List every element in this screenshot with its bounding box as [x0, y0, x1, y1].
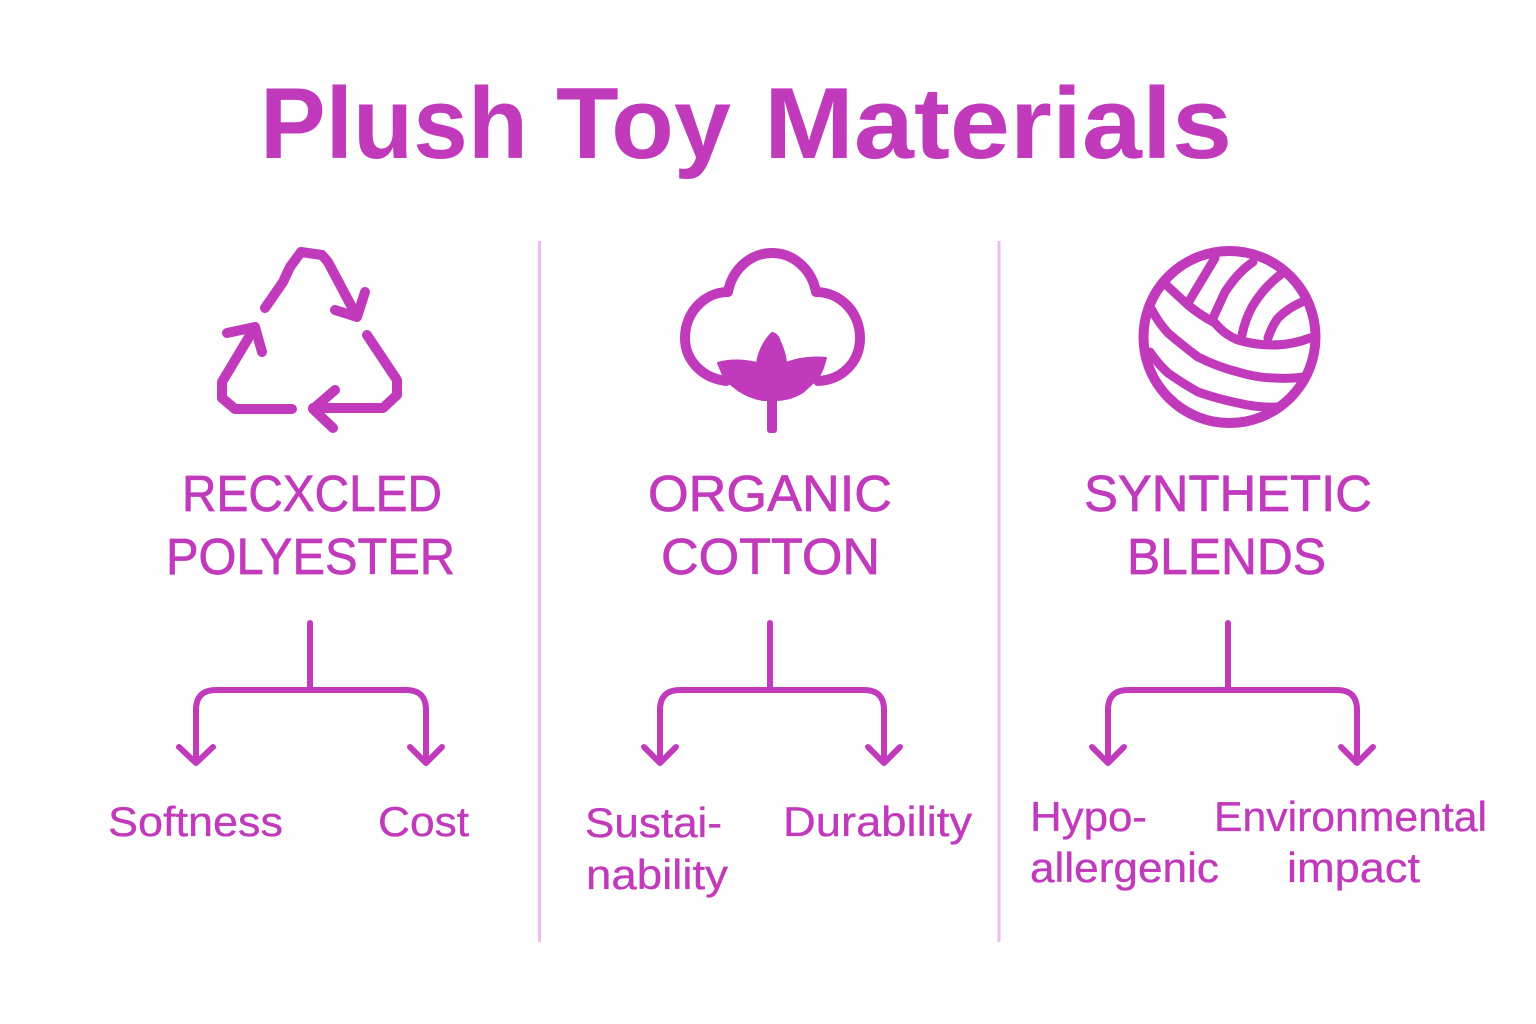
label: hypoallergenic: allergenic	[1030, 844, 1219, 891]
label: environmental impact	[1214, 793, 1487, 891]
heading: organic cotton: ORGANIC	[648, 465, 892, 522]
icon: cotton boll	[685, 253, 860, 433]
heading: organic cotton: COTTON	[661, 528, 880, 585]
icon: yarn ball	[1144, 251, 1316, 423]
connector arrows	[1092, 623, 1373, 763]
connector arrows	[179, 623, 442, 763]
heading: recycled polyester: POLYESTER	[166, 528, 455, 585]
label: environmental impact: impact	[1287, 844, 1420, 891]
panel: synthetic blends	[1030, 251, 1487, 891]
heading: organic cotton	[648, 465, 892, 585]
label: hypoallergenic: Hypo-	[1030, 793, 1147, 840]
icon: recycle arrows	[222, 252, 397, 428]
label: softness: Softness	[108, 798, 283, 845]
label: environmental impact: Environmental	[1214, 793, 1487, 840]
title: Materials	[764, 68, 1232, 180]
heading: synthetic blends: SYNTHETIC	[1084, 465, 1372, 522]
panel: organic cotton	[585, 253, 972, 898]
title: Toy	[556, 68, 731, 180]
title: Plush	[260, 68, 528, 180]
title	[260, 68, 1232, 180]
panel: recycled polyester	[108, 252, 469, 845]
heading: synthetic blends	[1084, 465, 1372, 585]
heading: recycled polyester: RECXCLED	[182, 465, 442, 522]
connector arrows	[644, 623, 900, 763]
label: sustainability: Sustai-	[585, 799, 722, 846]
label: hypoallergenic	[1030, 793, 1219, 891]
label: cost: Cost	[378, 798, 469, 845]
label: durability: Durability	[783, 798, 972, 845]
label: sustainability	[585, 799, 728, 898]
label: sustainability: nability	[586, 851, 728, 898]
heading: recycled polyester	[166, 465, 455, 585]
heading: synthetic blends: BLENDS	[1127, 528, 1326, 585]
